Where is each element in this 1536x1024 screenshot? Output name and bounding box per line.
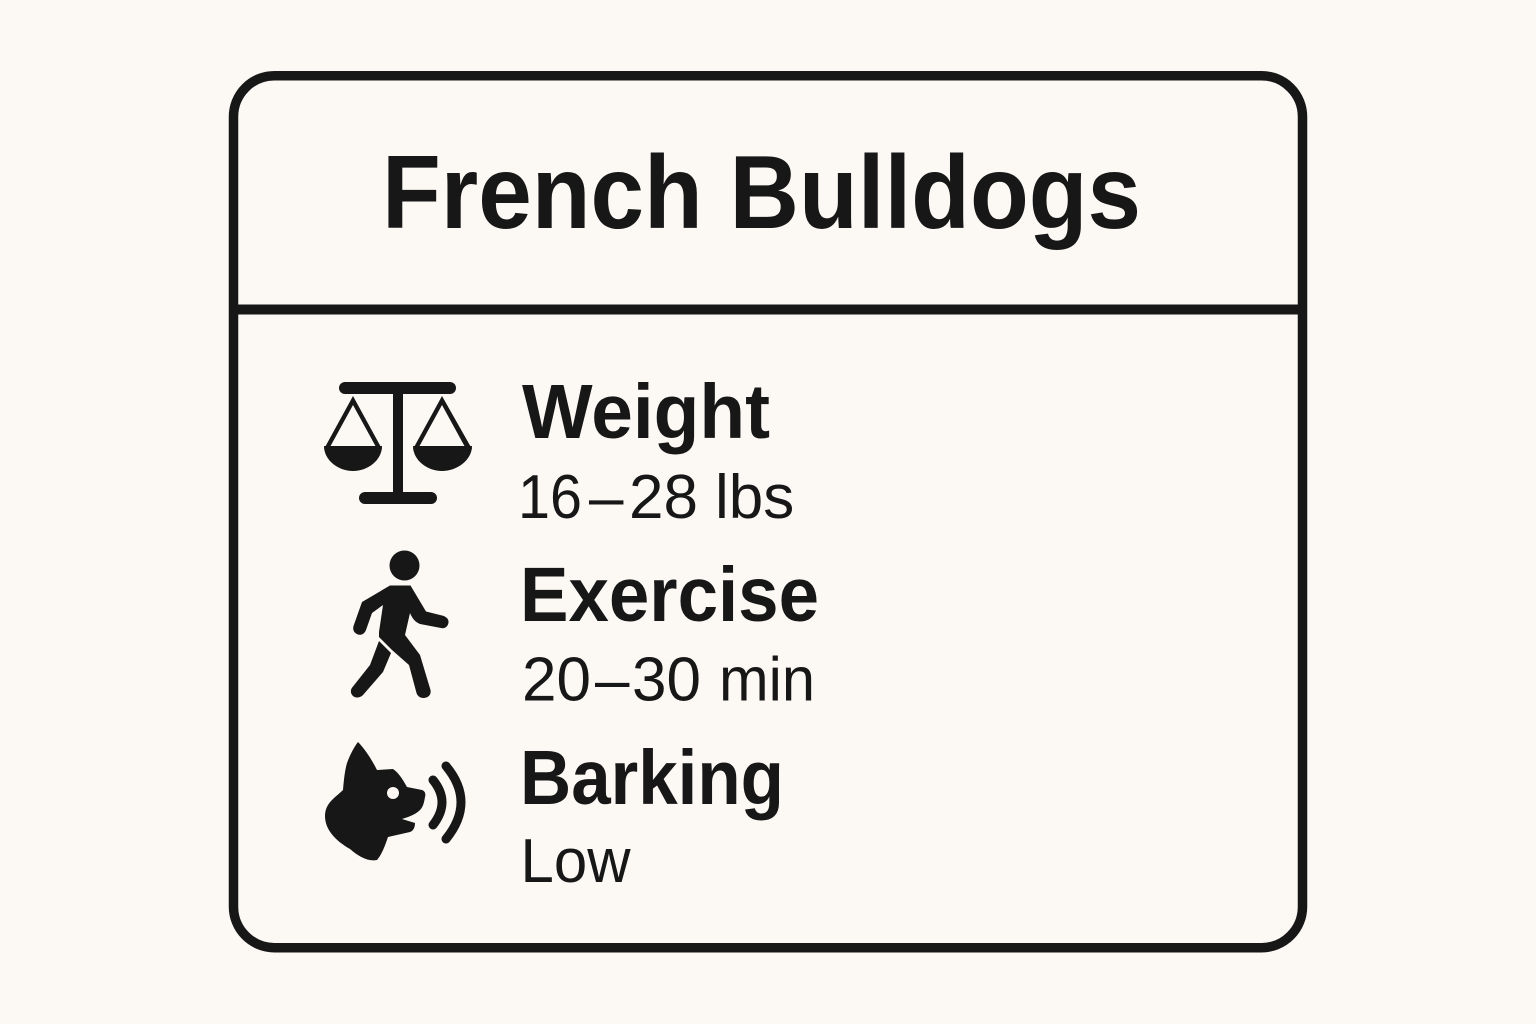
value: weight: – <box>589 463 624 532</box>
heading: exercise: Exercise <box>520 552 819 638</box>
panel: breed card <box>234 76 1302 948</box>
value: exercise: min <box>719 646 815 714</box>
icon: walking person <box>351 550 449 698</box>
heading: weight: Weight <box>522 369 770 455</box>
icon: barking dog <box>325 742 461 860</box>
value: exercise: – <box>595 646 630 714</box>
value: weight: 28 <box>629 463 715 532</box>
heading: barking: Barking <box>520 735 784 821</box>
title: French Bulldogs <box>382 135 1141 251</box>
value: exercise: 30 <box>632 646 718 714</box>
value: exercise: 20 <box>522 646 591 714</box>
icon: balance scale <box>324 382 472 504</box>
value: weight: lbs <box>715 463 794 532</box>
value: barking: Low <box>520 827 631 896</box>
value: weight: 16 <box>518 463 582 532</box>
